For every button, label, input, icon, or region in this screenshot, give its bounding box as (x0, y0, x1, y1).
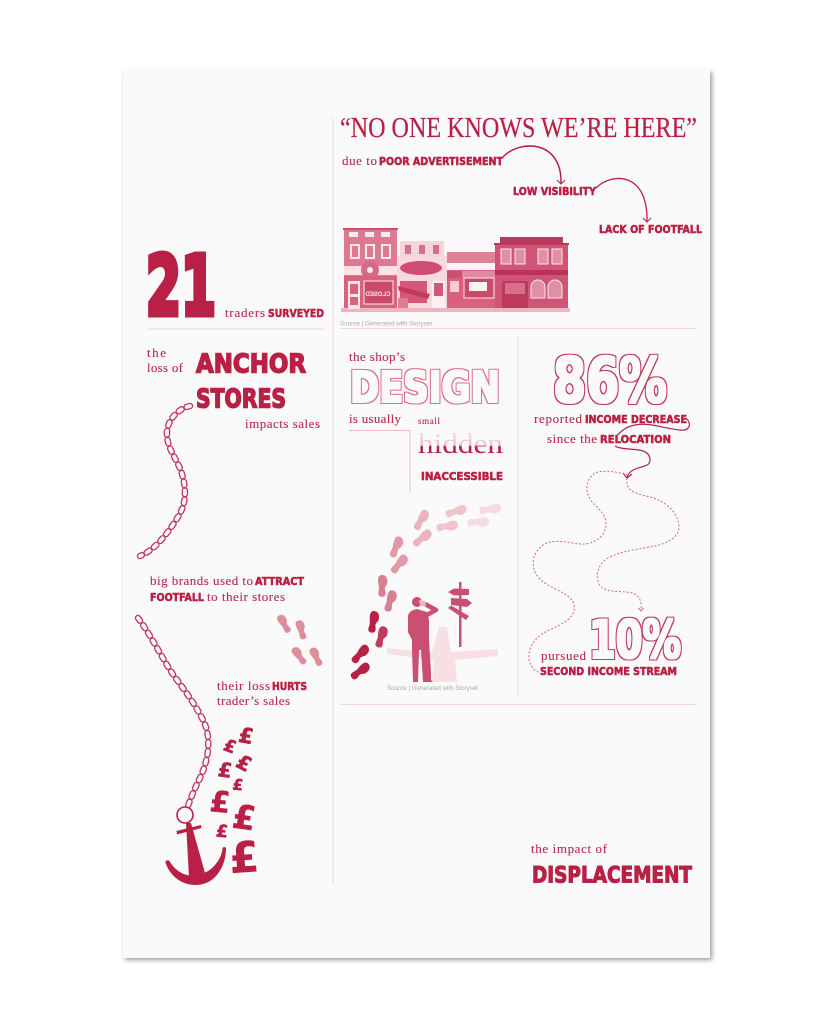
stat: 86 percent income decrease: since the (547, 431, 597, 446)
heading: loss of anchor stores: STORES (196, 384, 286, 414)
heading: shop's design: DESIGN (350, 363, 500, 413)
dividers (147, 118, 696, 885)
arrow: swash from income decrease (615, 418, 689, 478)
stat: 86 percent income decrease (534, 344, 687, 446)
text: big brands attract footfall (150, 573, 305, 604)
text: their loss hurts sales: their loss (217, 678, 270, 693)
stat: 86 percent income decrease: RELOCATION (600, 434, 671, 446)
stat: 86 percent income decrease: INCOME DECREASE (585, 414, 687, 426)
text: their loss hurts sales: HURTS (272, 681, 307, 693)
text: their loss hurts sales (217, 678, 307, 708)
stat: 21 traders surveyed: SURVEYED (268, 308, 324, 320)
illustration: closed shopfronts (341, 228, 570, 312)
arrow: visibility to footfall (596, 178, 651, 222)
stat: 10 percent second income: pursued (541, 648, 586, 663)
icon: falling pound signs: £ (221, 736, 239, 758)
stat: 10 percent second income: 10% (589, 610, 681, 671)
cause chain: poor advertisement: due to (342, 153, 377, 168)
heading: shop's design: is usually (349, 411, 402, 426)
source credit: shops: Source | Generated with Storyset (340, 320, 432, 328)
design attributes: INACCESSIBLE (421, 471, 503, 483)
icon: falling pound signs: £ (208, 784, 232, 820)
text: low visibility: LOW VISIBILITY (513, 186, 596, 198)
icon: lower chain (138, 618, 208, 806)
title quote: “NO ONE KNOWS WE’RE HERE” (340, 113, 697, 144)
icon: falling pound signs: £ (230, 797, 258, 838)
heading: loss of anchor stores: impacts sales (245, 416, 320, 431)
icon: falling pound signs: £ (232, 775, 244, 794)
icon: upper chain (140, 406, 190, 556)
icon: falling pound signs: £ (237, 723, 255, 749)
stat: 86 percent income decrease: reported (534, 411, 582, 426)
icon: footprints leaving (276, 613, 325, 667)
dashed winding paths (529, 471, 679, 672)
design attributes: small (418, 416, 440, 426)
text: their loss hurts sales: trader’s sales (217, 693, 290, 708)
closing title: DISPLACEMENT (532, 864, 692, 888)
icon: falling pound signs (208, 723, 260, 883)
heading: loss of anchor stores: ANCHOR (196, 350, 306, 380)
icon: anchor (165, 807, 226, 885)
text: big brands attract footfall: FOOTFALL (150, 592, 204, 604)
heading: loss of anchor stores: the (147, 345, 166, 360)
closing title: the impact of (531, 841, 608, 856)
text: lack of footfall: LACK OF FOOTFALL (599, 224, 702, 236)
heading: shop's design (349, 349, 500, 426)
arrow: advertisement to visibility (503, 146, 565, 184)
stat: 10 percent second income (540, 610, 681, 678)
bracket line (349, 430, 410, 492)
text: big brands attract footfall: ATTRACT (255, 576, 305, 588)
stat: 86 percent income decrease: 86% (553, 344, 667, 417)
poster background (123, 69, 712, 960)
cause chain: poor advertisement (342, 153, 504, 168)
design attributes (418, 416, 504, 483)
design attributes: hidden (418, 428, 504, 460)
stat: 21 traders surveyed: 21 (146, 240, 216, 334)
icon: falling pound signs: £ (232, 749, 256, 777)
source credit: man: Source | Generated with Storyset (387, 685, 478, 692)
icon: falling pound signs: £ (215, 821, 229, 843)
icon: fading footprints trail (349, 503, 502, 682)
stat: 10 percent second income: SECOND INCOME STREAM (540, 666, 677, 678)
stat: 21 traders surveyed (146, 240, 324, 334)
heading: shop's design: the shop’s (349, 349, 405, 364)
heading: loss of anchor stores: loss of (147, 360, 184, 375)
heading: loss of anchor stores (147, 345, 320, 431)
icon: falling pound signs: £ (228, 832, 260, 883)
illustration: closed shopfronts: CLOSED (365, 292, 391, 298)
text: big brands attract footfall: to their stores (207, 589, 285, 604)
cause chain: poor advertisement: POOR ADVERTISEMENT (379, 156, 504, 168)
icon: falling pound signs: £ (216, 757, 234, 783)
illustration: man at crossroads (387, 582, 498, 682)
closing title (531, 841, 692, 888)
stat: 21 traders surveyed: traders (225, 305, 265, 320)
text: big brands attract footfall: big brands used to (150, 573, 253, 588)
